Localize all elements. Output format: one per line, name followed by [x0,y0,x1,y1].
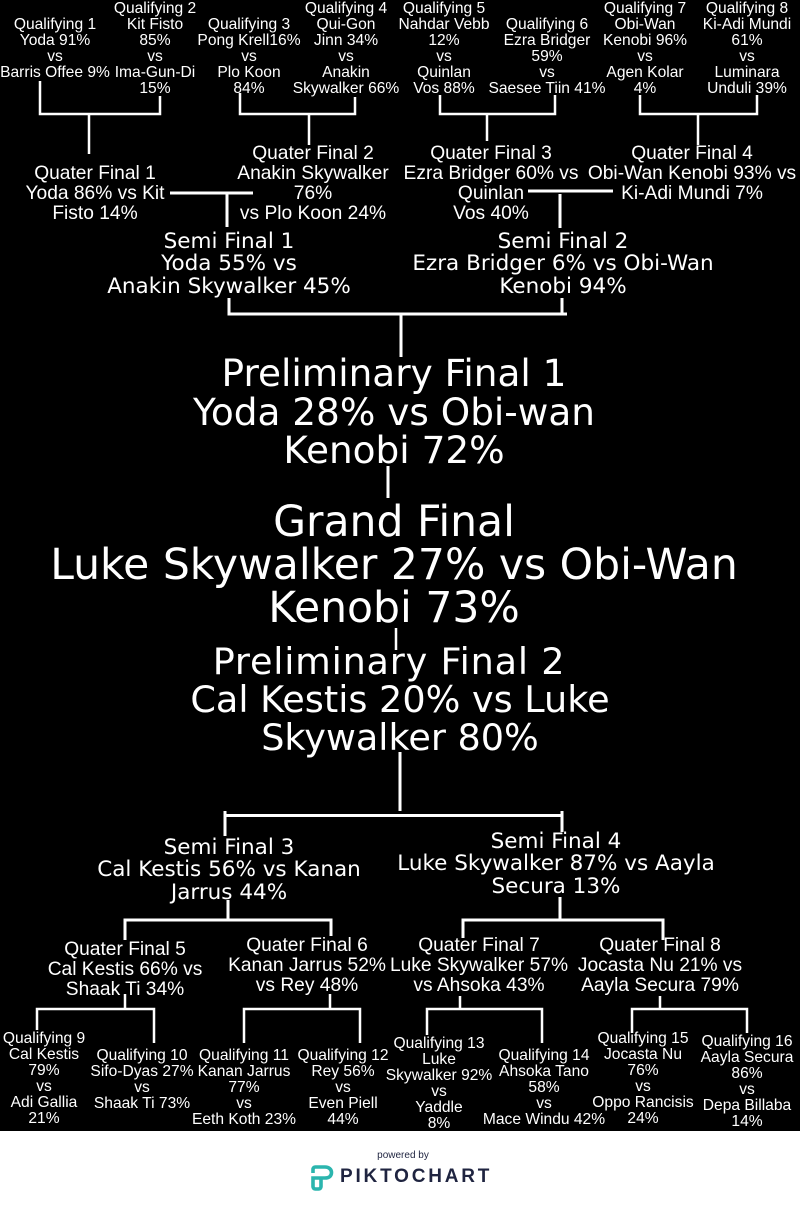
text: semi final 2 [412,229,714,299]
text: semi final 1: Anakin Skywalker 45% [107,274,351,299]
heading: grand final: Grand Final [273,498,515,547]
text: qualifying 9: 79% [28,1062,60,1079]
text: qualifying 3: Qualifying 3 [208,16,290,33]
text: qualifying 10: Sifo-Dyas 27% [90,1063,194,1080]
text: quarter final 5: Cal Kestis 66% vs [48,959,202,980]
text: qualifying 10: vs [134,1079,150,1096]
text: qualifying 12: Rey 56% [311,1063,375,1080]
text: quarter final 8 [578,935,742,996]
text: quarter final 7 [390,935,568,996]
text: semi final 3 [97,835,361,905]
text: qualifying 7: Qualifying 7 [604,0,686,17]
connector: qualifying 1-2 to quarter final 1 [40,81,160,154]
connector: quarter final 6 to qualifying 11-12 [244,994,360,1043]
text: qualifying 16: vs [739,1081,755,1098]
text: qualifying 6: 59% [531,48,563,65]
text: qualifying 6 [488,16,606,97]
text: qualifying 7: Obi-Wan [615,16,675,33]
text: qualifying 5 [398,0,490,97]
text: semi final 2: Semi Final 2 [498,229,628,254]
text: qualifying 8: Unduli 39% [707,80,787,97]
text: quarter final 5 [48,939,202,1000]
text: quarter final 6: vs Rey 48% [256,975,358,996]
text: quarter final 4: Quater Final 4 [631,143,753,164]
text: qualifying 7: Kenobi 96% [603,32,687,49]
text: qualifying 15: Oppo Rancisis [592,1094,694,1111]
text: semi final 3: Semi Final 3 [164,835,294,860]
text: piktochart wordmark: PIKTOCHART [340,1166,492,1187]
text: qualifying 12: Qualifying 12 [297,1047,389,1064]
text: quarter final 4: Obi-Wan Kenobi 93% vs [588,163,796,184]
text: qualifying 10: Qualifying 10 [96,1047,188,1064]
text: quarter final 8: Quater Final 8 [599,935,721,956]
text: qualifying 2: Kit Fisto [127,16,183,33]
connector: quarter finals 1-2 to semi final 1 [170,193,253,227]
text: qualifying 5: vs [436,48,452,65]
text: semi final 4: Semi Final 4 [491,829,621,854]
text: quarter final 3 [404,143,578,224]
text: qualifying 6: vs [539,64,555,81]
text: qualifying 9 [3,1030,85,1127]
text: qualifying 7: vs [637,48,653,65]
text: qualifying 2: Ima-Gun-Di [115,64,195,81]
text: qualifying 9: Cal Kestis [9,1046,79,1063]
text: qualifying 15: Qualifying 15 [597,1030,689,1047]
heading: preliminary final 1 [193,351,595,472]
text: qualifying 15: Jocasta Nu [604,1046,682,1063]
text: quarter final 5: Quater Final 5 [64,939,186,960]
text: qualifying 11 [192,1047,296,1128]
text: qualifying 9: 21% [28,1110,60,1127]
text: quarter final 4 [588,143,796,204]
connector: semi final 3 to quarter finals 5-6 [125,900,331,940]
text: qualifying 16: 86% [731,1065,763,1082]
text: qualifying 13: Yaddle [415,1099,463,1116]
text: quarter final 7: vs Ahsoka 43% [413,975,545,996]
text: semi final 2: Ezra Bridger 6% vs Obi-Wan [412,251,714,276]
heading: grand final: Kenobi 73% [268,584,520,633]
text: quarter final 4: Ki-Adi Mundi 7% [621,183,763,204]
text: qualifying 14: Ahsoka Tano [499,1063,589,1080]
text: qualifying 4: Skywalker 66% [293,80,399,97]
text: qualifying 12: Even Piell [308,1095,378,1112]
text: qualifying 4: Qui-Gon [317,16,375,33]
text: qualifying 16: Depa Billaba [703,1097,791,1114]
text: quarter final 1 [25,163,165,224]
text: qualifying 8: vs [739,48,755,65]
text: quarter final 2: Anakin Skywalker [237,163,389,184]
text: qualifying 2 [114,0,196,97]
text: qualifying 16: 14% [731,1113,763,1130]
text: qualifying 8: Luminara [714,64,780,81]
text: qualifying 13: vs [431,1083,447,1100]
heading: preliminary final 1: Kenobi 72% [283,428,505,472]
text: quarter final 2: 76% [294,183,332,204]
text: qualifying 13: Luke [422,1051,456,1068]
heading: preliminary final 2 [190,640,610,759]
connector: quarter finals 3-4 to semi final 2 [528,191,613,228]
text: qualifying 11: vs [236,1095,252,1112]
text: qualifying 16 [700,1033,794,1130]
text: quarter final 2: Quater Final 2 [252,143,374,164]
text: semi final 3: Jarrus 44% [171,880,287,905]
text: qualifying 3 [197,16,301,97]
text: qualifying 11: Eeth Koth 23% [192,1111,296,1128]
text: qualifying 14 [483,1047,605,1128]
connector: quarter final 5 to qualifying 9-10 [37,994,154,1043]
text: qualifying 9: Qualifying 9 [3,1030,85,1047]
text: quarter final 6: Kanan Jarrus 52% [228,955,386,976]
text: qualifying 12: 44% [327,1111,359,1128]
text: qualifying 5: Qualifying 5 [403,0,485,17]
text: semi final 2: Kenobi 94% [499,274,627,299]
text: qualifying 13: Skywalker 92% [386,1067,492,1084]
text: semi final 1: Yoda 55% vs [161,251,297,276]
text: qualifying 13: Qualifying 13 [393,1035,485,1052]
text: qualifying 10 [90,1047,194,1112]
text: semi final 1: Semi Final 1 [164,229,294,254]
heading: grand final: Luke Skywalker 27% vs Obi-Wan [50,541,738,590]
text: qualifying 4: Anakin [322,64,370,81]
text: qualifying 1: vs [47,48,63,65]
text: qualifying 1: Yoda 91% [20,32,90,49]
text: qualifying 15: 24% [627,1110,659,1127]
text: qualifying 1: Barris Offee 9% [0,64,110,81]
text: qualifying 12 [297,1047,389,1128]
text: qualifying 2: 15% [139,80,171,97]
text: quarter final 8: Jocasta Nu 21% vs [578,955,742,976]
text: quarter final 1: Yoda 86% vs Kit [25,183,165,204]
text: qualifying 11: Qualifying 11 [199,1047,289,1064]
text: qualifying 14: Mace Windu 42% [483,1111,605,1128]
text: quarter final 6: Quater Final 6 [246,935,368,956]
connector: qualifying 3-4 to quarter final 2 [240,93,355,145]
text: qualifying 11: Kanan Jarrus [198,1063,290,1080]
connector: qualifying 5-6 to quarter final 3 [440,95,555,141]
text: quarter final 2: vs Plo Koon 24% [240,203,386,224]
text: qualifying 4 [293,0,399,97]
text: quarter final 1: Fisto 14% [52,203,138,224]
text: qualifying 10: Shaak Ti 73% [94,1095,190,1112]
text: qualifying 5: Vos 88% [413,80,475,97]
text: qualifying 5: Nahdar Vebb [398,16,490,33]
text: semi final 3: Cal Kestis 56% vs Kanan [97,857,361,882]
text: qualifying 5: Quinlan [417,64,471,81]
text: quarter final 7: Quater Final 7 [418,935,540,956]
text: quarter final 8: Aayla Secura 79% [581,975,739,996]
heading: preliminary final 2: Preliminary Final 2 [213,640,565,683]
connector: quarter final 8 to qualifying 15-16 [632,996,747,1033]
text: qualifying 14: 58% [528,1079,560,1096]
text: quarter final 3: Vos 40% [453,203,529,224]
text: qualifying 1: Qualifying 1 [14,16,96,33]
text: qualifying 2: Qualifying 2 [114,0,196,17]
text: qualifying 4: vs [338,48,354,65]
text: qualifying 3: vs [241,48,257,65]
text: qualifying 5: 12% [428,32,460,49]
text: qualifying 9: Adi Gallia [11,1094,77,1111]
connector: semi final 4 to quarter finals 7-8 [463,897,663,940]
connector: preliminary final 2 to semi finals 3-4 [225,752,562,836]
footer: powered by piktochart [0,1131,800,1211]
text: qualifying 6: Saesee Tiin 41% [488,80,606,97]
text: qualifying 7 [603,0,687,97]
heading: preliminary final 2: Skywalker 80% [261,716,539,759]
text: semi final 4: Luke Skywalker 87% vs Aayla [397,851,715,876]
heading: grand final [50,498,738,633]
text: qualifying 14: Qualifying 14 [498,1047,590,1064]
text: quarter final 3: Quater Final 3 [430,143,552,164]
text: quarter final 3: Ezra Bridger 60% vs [404,163,578,184]
text: qualifying 8 [703,0,791,97]
text: qualifying 8: Ki-Adi Mundi [703,16,791,33]
text: quarter final 2 [237,143,389,224]
connector: semi finals 1-2 to preliminary final 1 [229,298,567,357]
text: semi final 1 [107,229,351,299]
text: qualifying 16: Aayla Secura [701,1049,793,1066]
text: semi final 4: Secura 13% [492,874,620,899]
text: qualifying 12: vs [335,1079,351,1096]
text: semi final 4 [397,829,715,899]
heading: preliminary final 2: Cal Kestis 20% vs Luke [190,678,610,721]
text: qualifying 8: Qualifying 8 [706,0,788,17]
text: qualifying 13 [386,1035,492,1132]
text: quarter final 6 [228,935,386,996]
icon: piktochart logo [311,1165,334,1191]
connector: preliminary final 1 to grand final [386,466,390,498]
text: qualifying 9: vs [36,1078,52,1095]
text: qualifying 14: vs [536,1095,552,1112]
text: qualifying 1 [0,16,110,81]
text: qualifying 13: 8% [428,1115,450,1132]
text: qualifying 15 [592,1030,694,1127]
text: powered by: powered by [377,1150,429,1161]
text: qualifying 11: 77% [228,1079,260,1096]
connector: grand final to preliminary final 2 [395,628,397,650]
heading: preliminary final 1: Yoda 28% vs Obi-wan [193,390,595,434]
text: qualifying 7: 4% [634,80,656,97]
heading: preliminary final 1: Preliminary Final 1 [222,351,566,395]
text: qualifying 3: Pong Krell16% [197,32,301,49]
text: qualifying 15: vs [635,1078,651,1095]
text: qualifying 3: Plo Koon [217,64,281,81]
text: quarter final 1: Quater Final 1 [34,163,156,184]
connector: qualifying 7-8 to quarter final 4 [640,95,757,145]
text: qualifying 16: Qualifying 16 [701,1033,793,1050]
text: qualifying 15: 76% [627,1062,659,1079]
text: qualifying 3: 84% [233,80,265,97]
text: qualifying 4: Jinn 34% [314,32,378,49]
text: qualifying 4: Qualifying 4 [305,0,387,17]
connector: quarter final 7 to qualifying 13-14 [427,996,542,1043]
text: quarter final 5: Shaak Ti 34% [66,979,184,1000]
text: qualifying 2: vs [147,48,163,65]
text: quarter final 7: Luke Skywalker 57% [390,955,568,976]
text: qualifying 2: 85% [139,32,171,49]
text: qualifying 7: Agen Kolar [606,64,684,81]
text: qualifying 6: Ezra Bridger [504,32,590,49]
text: qualifying 8: 61% [731,32,763,49]
text: quarter final 3: Quinlan [458,183,524,204]
text: qualifying 6: Qualifying 6 [506,16,588,33]
